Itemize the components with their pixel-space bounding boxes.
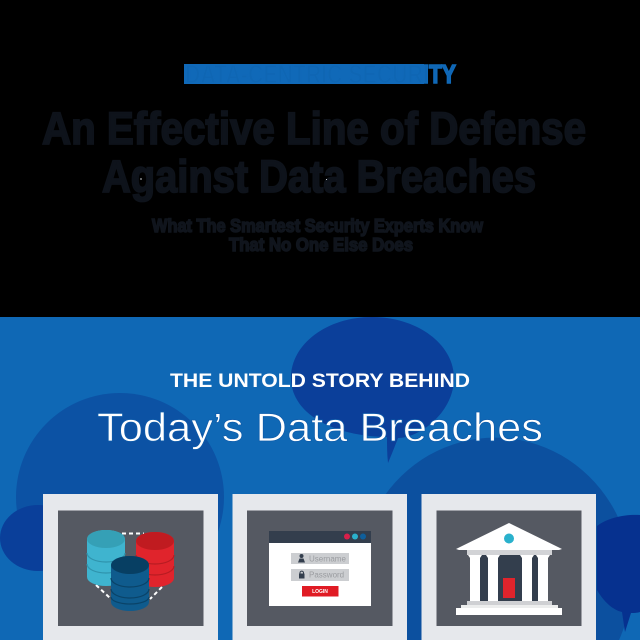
speech bubbles background	[0, 317, 640, 640]
red cylinder	[136, 532, 174, 587]
bubble: far right	[597, 515, 640, 632]
username field: Username	[309, 554, 346, 564]
card: login	[232, 494, 407, 640]
main title	[42, 103, 586, 202]
login button: LOGIN	[312, 589, 328, 595]
bubble: left	[16, 393, 224, 601]
subtitle: That No One Else Does	[229, 235, 413, 255]
dashed links	[96, 534, 162, 599]
icon: bank building	[456, 523, 562, 615]
bubble: large right	[358, 438, 632, 640]
specks	[140, 178, 327, 180]
navy cylinder	[111, 556, 149, 611]
password field: Password	[309, 570, 344, 580]
section title: Today’s Data Breaches	[97, 406, 543, 450]
bubble: top centre	[291, 317, 454, 463]
section heading: THE UNTOLD STORY BEHIND	[170, 370, 470, 392]
subtitle	[152, 216, 484, 255]
header section	[42, 59, 586, 255]
subtitle: What The Smartest Security Experts Know	[152, 216, 484, 236]
bubble: far left	[0, 505, 76, 571]
card: bank	[422, 494, 596, 640]
icon: connected databases	[87, 530, 174, 611]
blue section background	[0, 317, 640, 640]
steps	[456, 601, 562, 615]
main title: An Effective Line of Defense	[42, 103, 586, 154]
eyebrow label: DATA-CENTRIC SECURITY	[185, 59, 456, 89]
columns	[468, 555, 550, 602]
teal cylinder	[87, 530, 125, 586]
main title: Against Data Breaches	[102, 151, 536, 202]
card: databases	[43, 494, 218, 640]
icon: login window	[269, 531, 371, 606]
